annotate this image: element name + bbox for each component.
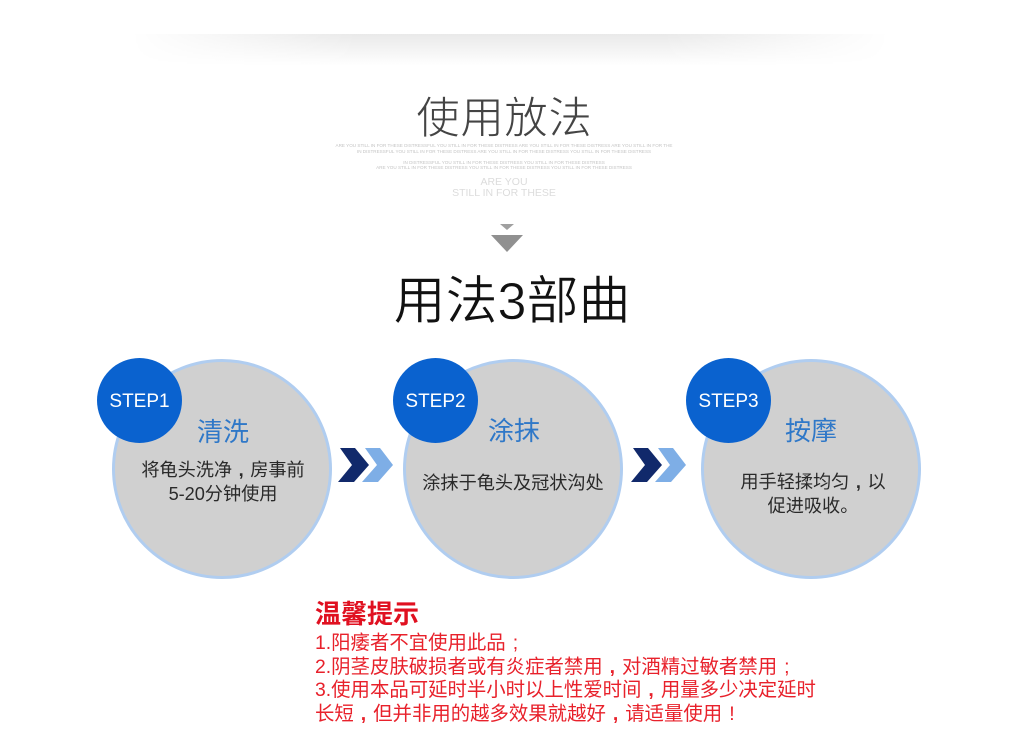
description 3: 用手轻揉均匀 以 bbox=[740, 472, 886, 492]
heading 清洗: 清洗 bbox=[197, 417, 249, 447]
tips text bbox=[315, 632, 816, 724]
tips text: 3.使用本品可延时半小时以上性爱时间 用量多少决定延时 bbox=[315, 679, 816, 701]
tips text: , bbox=[610, 656, 615, 678]
arrow: step 2 to 3 bbox=[631, 448, 686, 482]
title: 使用放法 bbox=[416, 94, 592, 143]
badge STEP2 bbox=[393, 358, 478, 443]
small English caption: IN DISTRESSFUL YOU STILL IN FOR THESE DISTRESS YOU STILL IN FOR THESE DISTRESS bbox=[403, 160, 605, 164]
tips text: ; bbox=[784, 656, 790, 678]
tips text: , bbox=[648, 679, 654, 701]
tips text: , bbox=[613, 702, 618, 724]
badge STEP1 bbox=[97, 358, 182, 443]
description 2: 涂抹于龟头及冠状沟处 bbox=[422, 473, 604, 493]
small English caption bbox=[336, 143, 672, 170]
faded English subtitle: ARE YOU bbox=[480, 176, 528, 188]
tips text: , bbox=[361, 702, 366, 724]
description 1 bbox=[141, 460, 305, 504]
circle 2 bbox=[403, 359, 623, 579]
badge STEP3 bbox=[686, 358, 771, 443]
icon: down arrows bbox=[491, 224, 523, 252]
faded English subtitle bbox=[452, 176, 556, 198]
faded English subtitle: STILL IN FOR THESE bbox=[452, 186, 556, 198]
tips block bbox=[315, 599, 816, 724]
description 1: 5-20分钟使用 bbox=[169, 484, 277, 504]
description 1: 将龟头洗净 房事前 bbox=[141, 460, 305, 480]
description 3: 促进吸收。 bbox=[768, 496, 858, 516]
panel: step 2 bbox=[393, 358, 623, 579]
small English caption: ARE YOU STILL IN FOR THESE DISTRESS YOU STILL IN FOR THESE DISTRESS YOU STILL IN FOR THESE DISTRESS bbox=[376, 165, 632, 170]
small English caption: ARE YOU STILL IN FOR THESE DISTRESSFUL YOU STILL IN FOR THESE DISTRESS ARE YOU STILL IN FOR THESE DISTRESS ARE YOU STILL IN FOR THE bbox=[336, 143, 672, 148]
tips text: 2.阴茎皮肤破损者或有炎症者禁用 对酒精过敏者禁用 bbox=[315, 656, 777, 678]
description 1: , bbox=[239, 460, 244, 480]
panel: step 1 bbox=[97, 358, 332, 579]
heading 涂抹: 涂抹 bbox=[488, 416, 540, 446]
description 3 bbox=[740, 472, 886, 516]
badge STEP1: STEP1 bbox=[109, 391, 170, 412]
arrow: step 1 to 2 bbox=[338, 448, 393, 482]
heading: 用法3部曲 bbox=[394, 273, 630, 331]
tips text: 1.阳痿者不宜使用此品 bbox=[315, 632, 506, 654]
heading 按摩: 按摩 bbox=[785, 416, 837, 446]
small English caption: IN DISTRESSFUL YOU STILL IN FOR THESE DISTRESS ARE YOU STILL IN FOR THESE DISTRESS YOU STILL IN FOR THESE DISTRESS bbox=[357, 148, 651, 154]
panel: step 3 bbox=[686, 358, 921, 579]
badge STEP3: STEP3 bbox=[698, 391, 759, 412]
description 3: , bbox=[856, 472, 861, 492]
tips heading: 温馨提示 bbox=[315, 599, 419, 629]
circle 3 bbox=[701, 359, 921, 579]
tips text: ; bbox=[513, 632, 518, 654]
tips text: 长短 但并非用的越多效果就越好 请适量使用 bbox=[315, 702, 722, 724]
badge STEP2: STEP2 bbox=[405, 391, 466, 412]
tips text: ! bbox=[729, 702, 735, 724]
top shadow band bbox=[218, 34, 802, 54]
circle 1 bbox=[112, 359, 332, 579]
